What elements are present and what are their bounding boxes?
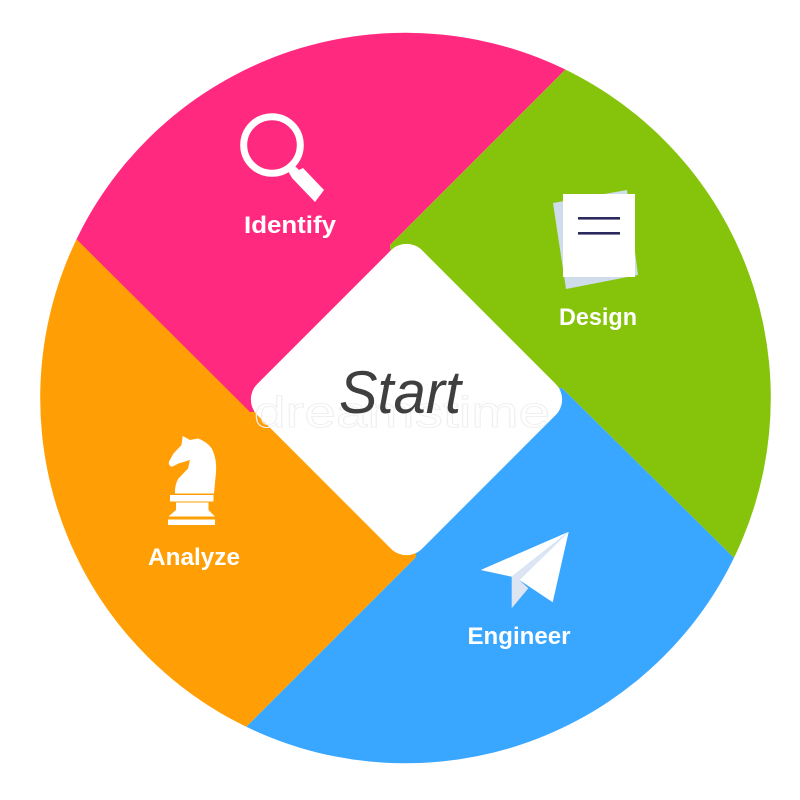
icon: paper sheets (553, 190, 638, 289)
watermark: dreamstime (254, 388, 550, 437)
icon: paper plane (481, 532, 569, 608)
segment: Identify (pink) (76, 32, 566, 412)
label: Analyze: Analyze (148, 544, 240, 571)
segment: Analyze (orange) (40, 239, 416, 727)
label: Identify: Identify (244, 212, 337, 239)
segment: Design (green) (390, 70, 771, 558)
segment: Engineer (blue) (246, 388, 734, 764)
icon: magnifying glass (244, 117, 324, 202)
label: Design: Design (559, 304, 637, 331)
icon: chess knight (168, 436, 216, 525)
center label: Start: Start (339, 359, 463, 426)
center diamond (242, 235, 571, 564)
label: Engineer: Engineer (468, 623, 570, 650)
